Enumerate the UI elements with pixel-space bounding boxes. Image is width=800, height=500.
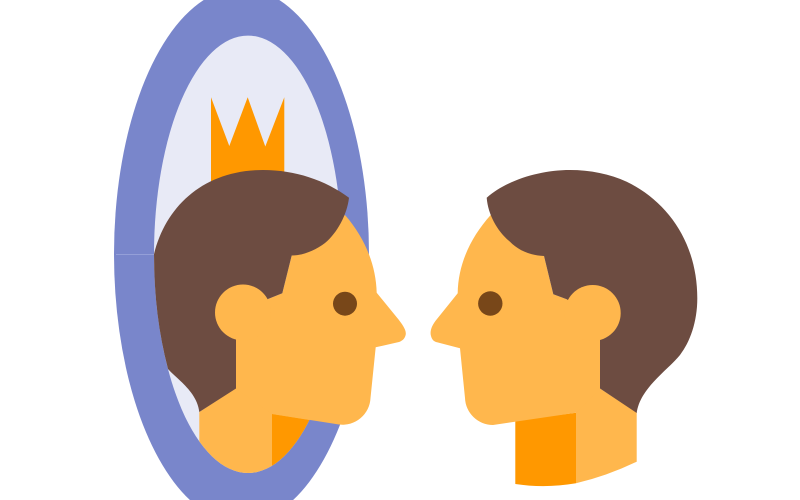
man collar shadow: [515, 413, 576, 486]
man ear: [565, 285, 621, 341]
mirror frame: [114, 0, 369, 500]
crown reflection: [211, 97, 284, 185]
man face: [431, 215, 600, 425]
mirror glass: [154, 36, 342, 473]
reflected face: [236, 215, 406, 425]
man neck and shoulder: [576, 380, 637, 483]
man eye: [478, 291, 502, 316]
reflected eye: [333, 292, 357, 316]
reflected hair: [154, 170, 349, 412]
reflected neck and shoulder: [199, 388, 310, 473]
illustration: man looking in mirror: [114, 0, 698, 500]
reflected collar shadow: [272, 414, 310, 466]
reflected ear: [215, 284, 271, 340]
man hair: [487, 170, 697, 413]
